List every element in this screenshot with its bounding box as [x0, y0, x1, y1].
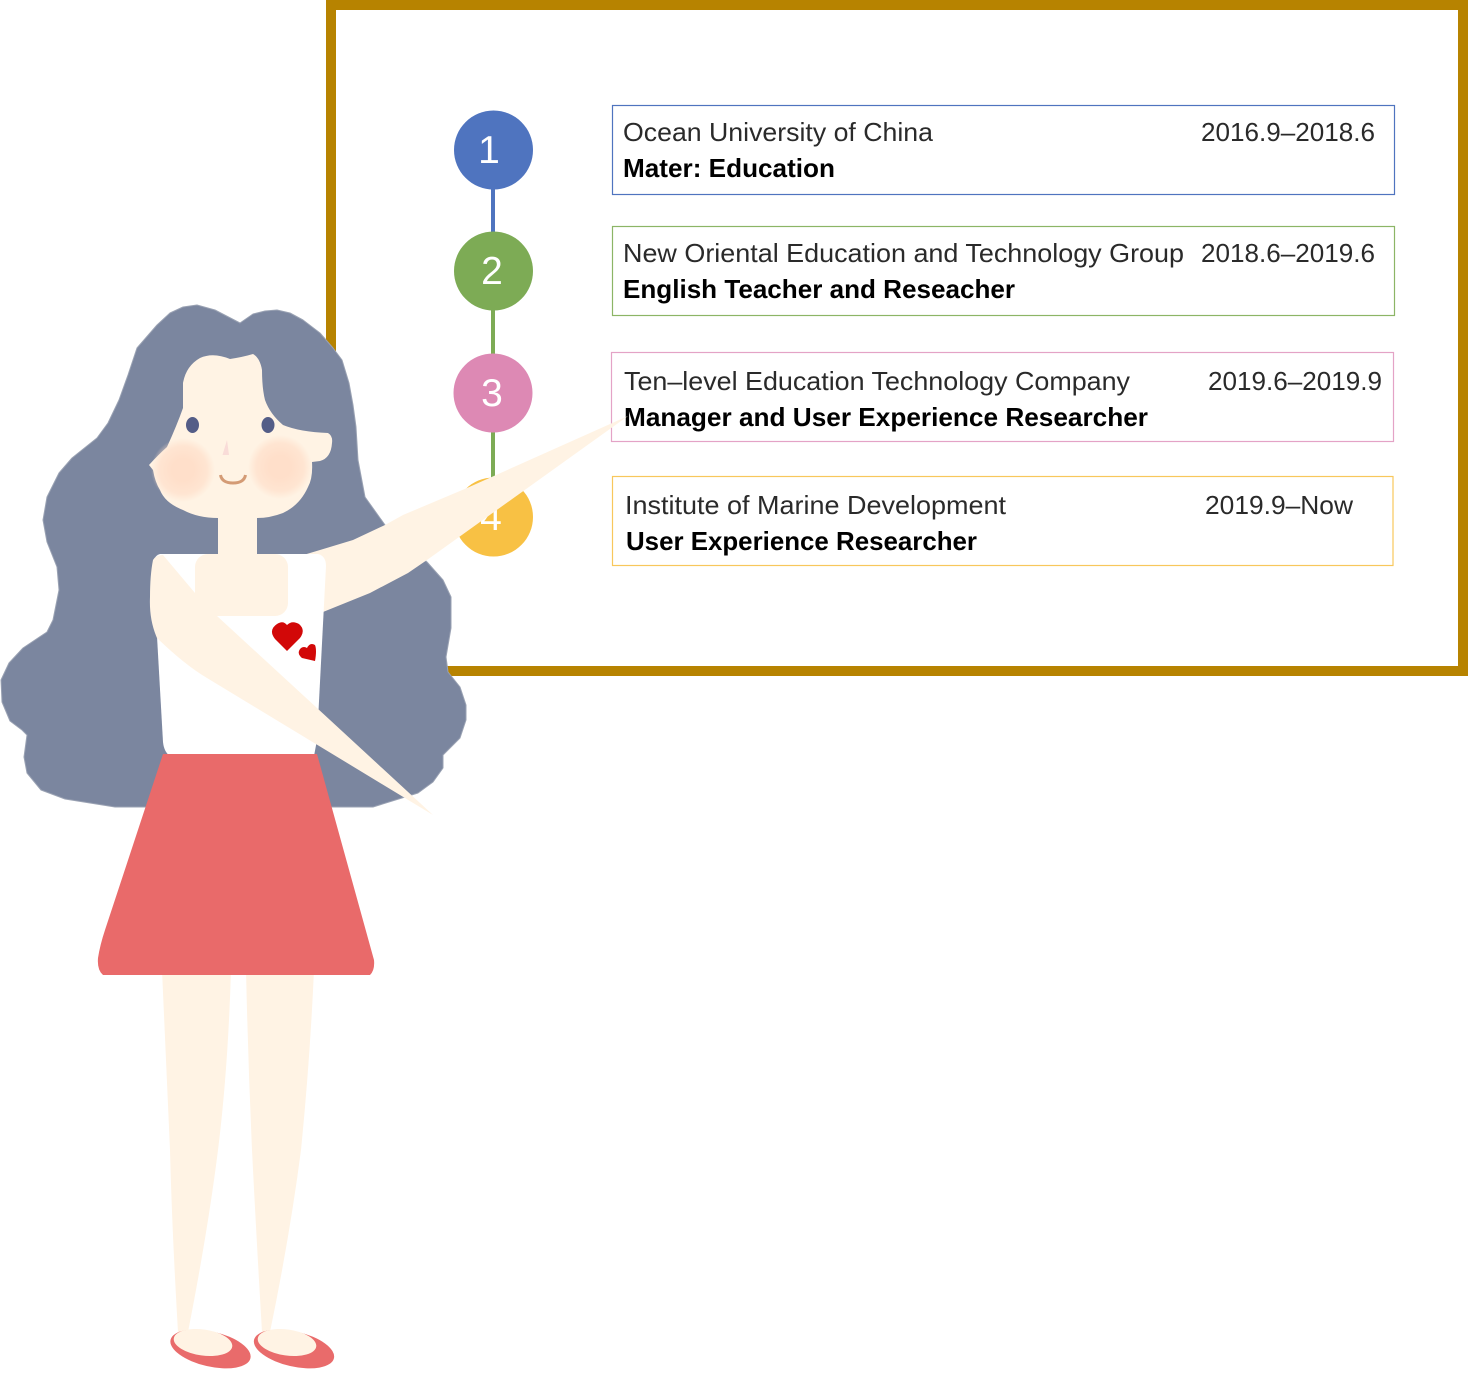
- hair: [1, 305, 466, 807]
- card 1: Ocean University of China: 2016.9–2018.6: [1201, 117, 1375, 147]
- legs: [162, 970, 314, 1332]
- step marker 4: 4: [480, 496, 502, 539]
- card 2: New Oriental: English Teacher and Reseacher: [623, 274, 1015, 304]
- cheeks: [151, 435, 312, 502]
- raised arm: [300, 416, 628, 620]
- step marker 1: 1: [478, 129, 500, 172]
- eyes: [186, 417, 274, 433]
- timeline connector lines: [491, 188, 495, 480]
- step marker 1: [454, 110, 533, 190]
- card 2: New Oriental: [612, 226, 1394, 316]
- card 1: Ocean University of China: [612, 106, 1394, 194]
- lowered arm: [150, 555, 433, 815]
- panel: timeline frame: [331, 5, 1463, 671]
- step marker 2: [454, 232, 533, 310]
- step marker 3: [454, 354, 532, 432]
- card 3: Ten-level Education: 2019.6–2019.9: [1208, 366, 1382, 396]
- white top: [153, 554, 326, 756]
- card 4: Institute of Marine Development: User Experience Researcher: [626, 526, 977, 556]
- nose: [222, 440, 229, 455]
- card 4: Institute of Marine Development: 2019.9–Now: [1205, 490, 1353, 520]
- step marker 4: [454, 478, 533, 556]
- card 3: Ten-level Education: Ten–level Education Technology Company: [624, 366, 1130, 396]
- chest: [195, 554, 288, 616]
- face and neck: [149, 354, 332, 560]
- card 2: New Oriental: 2018.6–2019.6: [1201, 238, 1375, 268]
- smile: [220, 475, 246, 483]
- card 1: Ocean University of China: Mater: Education: [623, 153, 835, 183]
- step marker 3: 3: [481, 372, 503, 415]
- card 3: Ten-level Education: Manager and User Experience Researcher: [624, 402, 1148, 432]
- card 3: Ten-level Education: [612, 352, 1394, 442]
- card 1: Ocean University of China: Ocean University of China: [623, 117, 934, 147]
- hearts: [272, 622, 316, 661]
- skirt: [98, 754, 374, 975]
- card 4: Institute of Marine Development: [612, 476, 1393, 566]
- shoes: [167, 1323, 338, 1375]
- step marker 2: 2: [481, 250, 503, 293]
- card 4: Institute of Marine Development: Institute of Marine Development: [625, 490, 1007, 520]
- illustration: teacher figure: [1, 305, 628, 1375]
- card 2: New Oriental: New Oriental Education and Technology Group: [623, 238, 1184, 268]
